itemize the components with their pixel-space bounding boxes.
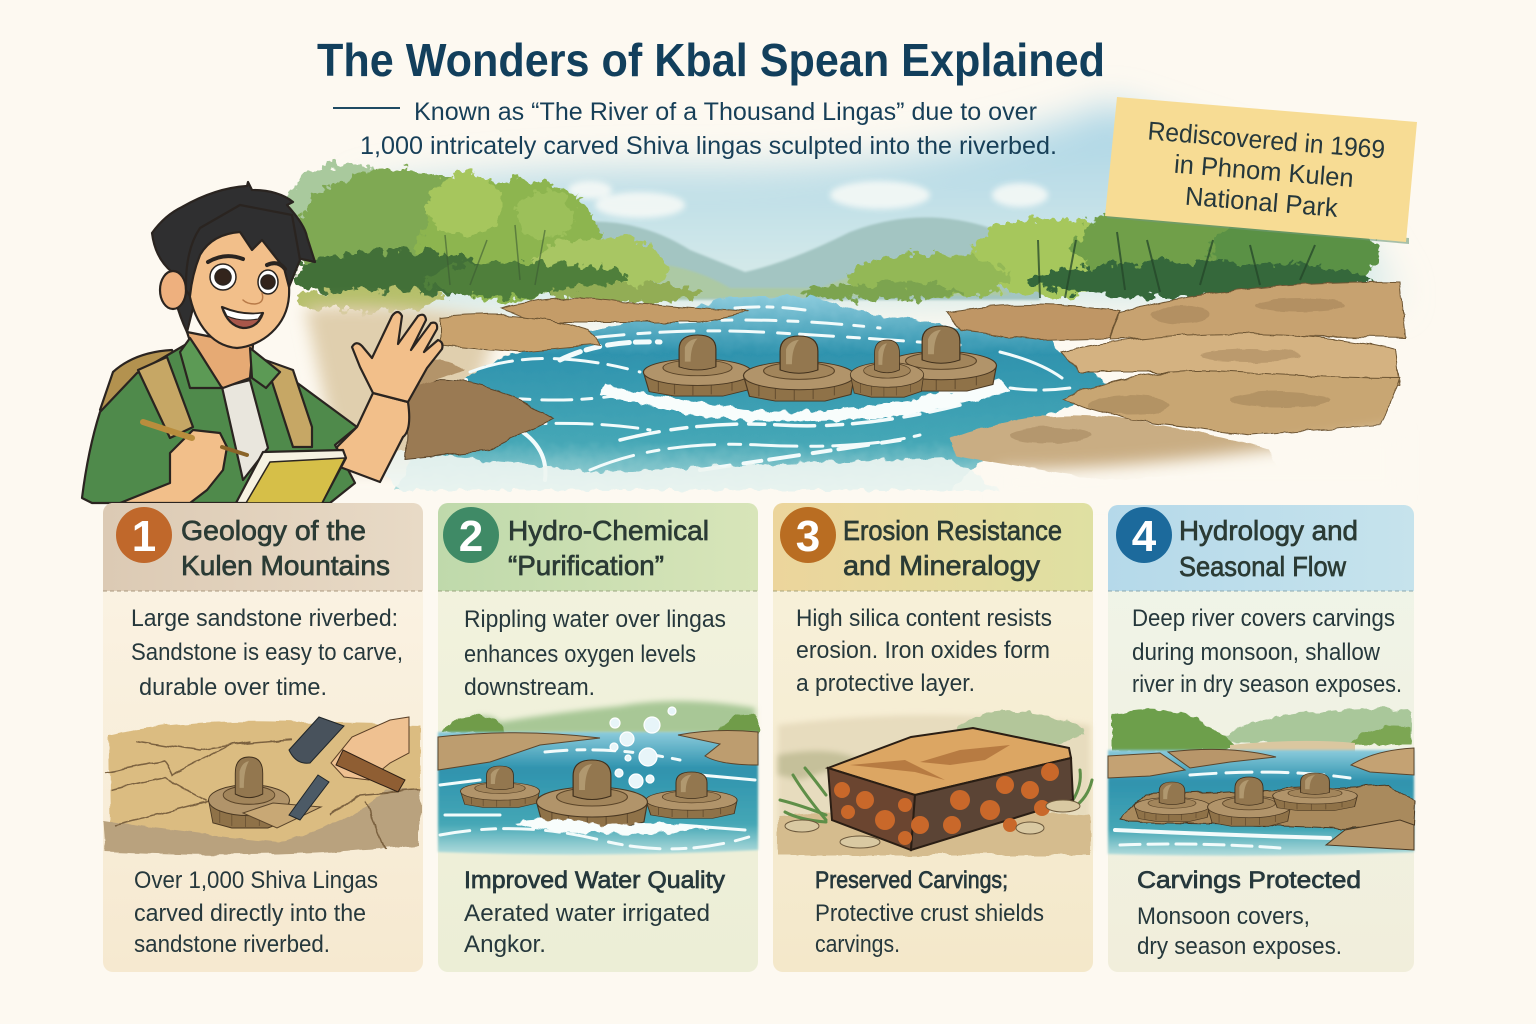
panel 2: hydro-chemical (438, 503, 758, 972)
result text: dry season exposes. (1137, 933, 1342, 960)
panel background (103, 503, 423, 972)
river (395, 296, 1110, 490)
description (796, 605, 1052, 697)
rock mottling (1010, 298, 1345, 443)
distant hills (580, 217, 1040, 300)
heading: Hydro-Chemical (508, 515, 709, 546)
heading: and Mineralogy (843, 550, 1040, 581)
backpack straps (138, 357, 193, 438)
number badge 4: 4 (1132, 512, 1157, 561)
character: explorer with notebook (82, 182, 442, 503)
heading: Kulen Mountains (181, 550, 390, 581)
description (131, 605, 403, 701)
fringe (186, 205, 300, 296)
panel 4: hydrology (1108, 505, 1414, 972)
writing forearm and hand (120, 430, 227, 503)
header band (438, 503, 758, 591)
number badge 3 (780, 507, 836, 563)
notebook (236, 450, 346, 503)
subtitle: Known as “The River of a Thousand Lingas” due to over (414, 98, 1037, 126)
result text (1137, 867, 1361, 960)
left bank rocks (405, 298, 750, 458)
description: durable over time. (139, 674, 327, 701)
left tree mass (290, 163, 705, 311)
shirt body (82, 342, 357, 503)
callout note: rediscovered: Rediscovered in 1969 (1147, 115, 1386, 164)
left tree trunks (445, 225, 545, 285)
panel 3: erosion resistance (773, 503, 1093, 972)
header band (1108, 505, 1414, 591)
foam around lingas (600, 380, 1010, 421)
description: downstream. (464, 674, 595, 701)
result text: sandstone riverbed. (134, 931, 330, 958)
callout note: rediscovered: National Park (1184, 181, 1340, 223)
eyebrows (208, 256, 285, 269)
result text (815, 867, 1044, 958)
result text: Aerated water irrigated (464, 900, 710, 927)
result text (134, 867, 378, 958)
smile (222, 307, 263, 328)
panel background (438, 503, 758, 972)
heading (1179, 515, 1358, 582)
description (1132, 605, 1402, 698)
result text: Carvings Protected (1137, 867, 1361, 894)
right bank rocks (945, 282, 1405, 480)
river landscape scene (290, 105, 1405, 495)
raised arm (337, 393, 409, 482)
back hair (152, 182, 315, 332)
description: a protective layer. (796, 670, 975, 697)
heading: “Purification” (508, 550, 664, 581)
description (464, 606, 726, 701)
right rock fade (1000, 430, 1400, 495)
callout note: rediscovered (1105, 97, 1417, 244)
result text: Improved Water Quality (464, 867, 725, 894)
heading (843, 515, 1062, 581)
right tree trunks (1038, 232, 1315, 298)
heading (508, 515, 709, 581)
heading: Geology of the (181, 515, 366, 546)
backpack (100, 350, 200, 430)
callout note: rediscovered: in Phnom Kulen (1173, 149, 1355, 193)
subtitle: 1,000 intricately carved Shiva lingas sculpted into the riverbed. (360, 132, 1057, 160)
description: river in dry season exposes. (1132, 671, 1402, 698)
pale left shore (305, 306, 500, 470)
result text (464, 867, 725, 958)
sky wash (360, 105, 1400, 320)
subtitle (333, 98, 1057, 160)
description: Sandstone is easy to carve, (131, 639, 403, 666)
description: during monsoon, shallow (1132, 639, 1381, 666)
pencil (143, 422, 247, 455)
number badge 2: 2 (459, 512, 483, 561)
result text: Angkor. (464, 931, 546, 958)
result text: carvings. (815, 931, 900, 958)
title: The Wonders of Kbal Spean Explained (317, 34, 1105, 86)
number badge 2 (443, 507, 499, 563)
collar (180, 338, 222, 388)
description: High silica content resists (796, 605, 1052, 632)
header band (103, 503, 423, 591)
illustration: aerated water over lingas (438, 701, 758, 855)
result text: Protective crust shields (815, 900, 1044, 927)
carved lingas in river (643, 326, 996, 401)
result text: Preserved Carvings; (815, 867, 1008, 894)
heading (181, 515, 390, 581)
illustration: iron-crusted sandstone block (778, 710, 1092, 855)
result text: Over 1,000 Shiva Lingas (134, 867, 378, 894)
number badge 3: 3 (796, 512, 820, 561)
number badge 4 (1116, 507, 1172, 563)
number badge 1 (116, 507, 172, 563)
foam foreground (360, 448, 1000, 490)
description: Large sandstone riverbed: (131, 605, 398, 632)
illustration: carving a linga in sandstone (103, 717, 420, 855)
description: enhances oxygen levels (464, 641, 696, 668)
heading: Seasonal Flow (1179, 551, 1347, 582)
ear (160, 271, 186, 309)
panel background (1108, 505, 1414, 972)
description: erosion. Iron oxides form (796, 637, 1050, 664)
nose (243, 293, 263, 304)
water ripples (466, 307, 1070, 480)
heading: Erosion Resistance (843, 515, 1062, 546)
panel 1: geology (103, 503, 423, 972)
waving hand (352, 312, 442, 402)
right tree mass (800, 203, 1380, 300)
white tee (222, 380, 268, 480)
panel background (773, 503, 1093, 972)
head (188, 230, 289, 348)
illustration: river at dry season (1108, 708, 1414, 856)
clouds (568, 181, 1048, 218)
description: Rippling water over lingas (464, 606, 726, 633)
header band (773, 503, 1093, 591)
number badge 1: 1 (132, 512, 156, 561)
description: Deep river covers carvings (1132, 605, 1395, 632)
result text: Monsoon covers, (1137, 903, 1310, 930)
eyes (210, 264, 278, 294)
heading: Hydrology and (1179, 515, 1358, 546)
neck (187, 332, 253, 388)
result text: carved directly into the (134, 900, 366, 927)
